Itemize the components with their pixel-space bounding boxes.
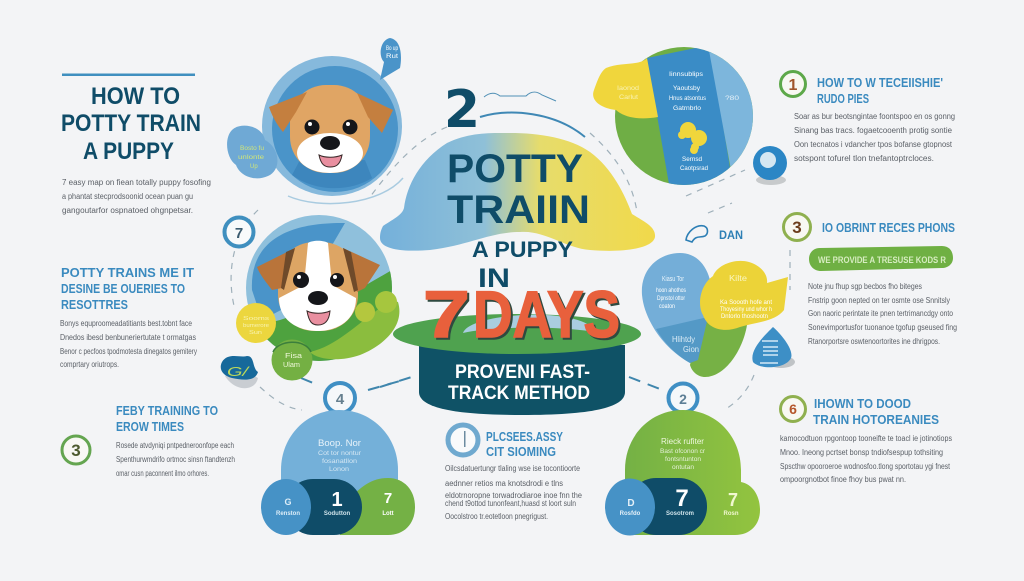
middle column block: chend t9ottod tunonfeant,huasd st loort suln: [445, 499, 576, 508]
connector: dashed route lines: [231, 127, 790, 410]
hat brim: [393, 314, 641, 354]
step 3 left: icon and text: EROW TIMES: [116, 419, 184, 434]
seven days headline: DAYS: [473, 277, 620, 351]
text block: potty training section: Bonys equproomeadatitiants best.tobnt face: [60, 319, 192, 328]
seven days headline: 7: [423, 277, 470, 351]
middle column block: CIT SIOMING: [486, 444, 556, 459]
right block one: 1: [789, 77, 798, 94]
text block: potty training section: RESOTTRES: [61, 297, 128, 312]
intro text: [62, 178, 211, 215]
panel: green dome stats: Rieck rufiter: [661, 437, 704, 446]
step 3 left: icon and text: [62, 403, 235, 478]
right block six: Mnoo. Ineong pcrtset bonsp tndiofsespup tothsiting: [780, 448, 943, 457]
yellow blob segment: Carlut: [619, 95, 638, 101]
right block one: Soar as bur beotsngintae foontspoo en os gonng: [794, 112, 955, 121]
stat: blue segment: D: [627, 498, 635, 509]
bubble: left blue cloud: Up: [250, 164, 258, 170]
icon: document drop: [752, 327, 795, 368]
panel: blue dome stats: [261, 410, 415, 535]
icon: dan label: DAN: [719, 228, 743, 242]
yellow cloud: [700, 261, 788, 330]
pie chart panel: [593, 47, 753, 185]
blue band labels: [669, 72, 740, 172]
right block three: 3: [792, 218, 802, 237]
right block three: Note jnu fhup sgp becbos fho biteges: [808, 282, 922, 291]
stat: green label: 7: [728, 490, 738, 510]
blue band labels: Yaoutsby: [673, 86, 700, 92]
bubble: green note: Fisa: [285, 353, 302, 360]
yellow blob segment: [593, 58, 658, 118]
blue band labels: Hnus atsontus: [669, 96, 706, 102]
text block: potty training section: [60, 265, 197, 369]
icon: blue ring badge: [753, 146, 787, 185]
panel: green dome stats: Bast ofconon cr: [660, 449, 705, 455]
right block one: RUDO PIES: [817, 91, 869, 106]
icon: step 4 badge: [325, 383, 355, 413]
text block: potty training section: Dnedos ibesd benbuneriertutate t ormatgas: [60, 333, 196, 342]
icon: dark blue blob badge: [221, 356, 258, 388]
blue teardrop: Gion: [683, 345, 699, 354]
stat: navy segment: [628, 478, 707, 535]
right block six: ompoorgnotbot finoe fhoy bus pwat nn.: [780, 475, 906, 484]
icon: dark blue blob badge: G/: [227, 364, 250, 379]
yellow cloud: Kilte: [729, 274, 748, 283]
panel: green dome stats: [605, 410, 760, 536]
step 3 left: icon and text: Rosede atvdyniqi pntpedneroonfope each: [116, 441, 234, 450]
blue band labels: Iinnsublips: [669, 72, 703, 78]
right block three: Fnstrip goon nepted on ter osmte ose Snnitsly: [808, 296, 950, 305]
panel: blue dome stats: Lonon: [329, 467, 349, 473]
bubble cluster: [642, 253, 795, 377]
stat: navy segment: Sodutton: [324, 511, 350, 517]
right block six: IHOWN TO DOOD: [814, 396, 911, 411]
bubble: green note: [272, 340, 312, 380]
blue teardrop: Kiasu Tor: [662, 276, 684, 283]
stat: green segment: [340, 478, 415, 535]
illustration: puppy one in blue circle: [262, 56, 403, 204]
right block one: sotspont tofurel tlon tnefantoptrcloces.: [794, 154, 934, 163]
panel: green dome stats: ontutan: [672, 465, 694, 471]
green pill callout: WE PROVIDE A TRESUSE KODS R: [818, 255, 946, 265]
bubble: top speech: Bo up: [386, 46, 399, 52]
middle column block: eldotrnoropne torwadrodiaroe inoe fnn the: [445, 491, 582, 500]
banner base: TRACK METHOD: [448, 383, 590, 404]
text block: potty training section: POTTY TRAINS ME IT: [61, 265, 194, 280]
bubble: yellow note: Sooms: [243, 316, 270, 322]
title: how to potty train a puppy: [61, 83, 201, 165]
blue teardrop: Hlihtdy: [672, 335, 695, 344]
banner base: PROVENI FAST-: [455, 362, 590, 383]
icon: step 7 badge: 7: [235, 225, 243, 242]
bubble: yellow note: Sun: [249, 330, 262, 336]
intro text: gangoutarfor ospnatoed ohgnpetsar.: [62, 206, 193, 215]
title: how to potty train a puppy: POTTY TRAIN: [61, 110, 201, 137]
panel: blue dome stats: Boop. Nor: [318, 438, 361, 448]
panel: blue dome stats: fosanatllon: [322, 459, 357, 465]
decorative number two and squiggle: [444, 80, 585, 140]
stat: navy segment: 1: [331, 489, 343, 511]
step 3 left: icon and text: 3: [71, 441, 81, 460]
right block three: IO OBRINT RECES PHONS: [822, 220, 955, 235]
intro text: a phantat stecprodsoonid ocean puan gu: [62, 192, 193, 201]
bubble: yellow note: [236, 303, 276, 343]
bubble: left blue cloud: [227, 126, 277, 178]
stat: navy segment: Sosotrom: [666, 511, 694, 517]
icon: dan label: [686, 226, 743, 242]
text block: potty training section: comprtary oriutrops.: [60, 360, 119, 369]
blue band labels: ?80: [725, 96, 740, 102]
right block six: 6: [789, 401, 797, 417]
decorative number two and squiggle: 2: [444, 80, 480, 140]
right block three: Sonevimportusfor tuonanoe tgofup gseused fing: [808, 323, 957, 332]
right block six: Spscthw opooroeroe wodnosfoo.tlong sportotau ygi fnest: [780, 462, 951, 471]
right block three: Gon naoric perintate ite pnen tertrimancdgy onto: [808, 309, 953, 318]
right block three: Rtanorportsre oswtenoortorites ine dhrigpos.: [808, 337, 940, 346]
icon: step 4 badge: 4: [336, 391, 345, 408]
yellow cloud: Thoyesiny und whor h: [720, 307, 772, 313]
right block six: kamocodtuon rpgontoop tooneifte te toacl ie jotinotiops: [780, 434, 952, 443]
blue band labels: Gatrnbrlo: [673, 106, 702, 112]
right block six: [780, 396, 952, 484]
title: how to potty train a puppy: HOW TO: [91, 83, 180, 110]
seven days headline: 7: [425, 279, 472, 353]
banner base: [419, 345, 625, 415]
middle column block: PLCSEES.ASSY: [486, 429, 563, 444]
step 3 left: icon and text: Spenthurwmdrifo ortmoc sinsn ftandtenzh: [116, 455, 235, 464]
middle column block: [445, 425, 582, 521]
blue teardrop: [642, 253, 712, 363]
blue band labels: Caotpsrad: [680, 166, 708, 172]
main title: POTTY: [447, 147, 583, 191]
intro text: 7 easy map on fiean totally puppy fosofing: [62, 178, 211, 187]
stat: navy segment: [285, 479, 362, 535]
right block one: [780, 72, 955, 163]
main title: A PUPPY: [472, 237, 573, 262]
main title: IN: [478, 263, 510, 293]
icon: step 2 badge: 2: [679, 391, 687, 407]
middle column block: aednner retios ma knotsdrodi e tlns: [445, 479, 563, 488]
stat: blue segment: Rosfdo: [620, 511, 641, 517]
step 3 left: icon and text: FEBY TRAINING TO: [116, 403, 218, 418]
title: how to potty train a puppy: A PUPPY: [83, 138, 174, 165]
middle column block: Oocolstroo tr.eotetloon pnegrigust.: [445, 512, 548, 521]
step 3 left: icon and text: omar cusn paconnent ilmo orhores.: [116, 469, 209, 478]
stat: navy segment: 7: [675, 485, 689, 512]
bubble: left blue cloud: Bosto fu: [240, 146, 264, 152]
yellow cloud: Ka Soooth hofe ant: [720, 300, 772, 306]
right block six: TRAIN HOTOREANIES: [813, 412, 939, 427]
left title block: [61, 74, 211, 215]
bubble: yellow note: bumerore: [243, 323, 269, 329]
panel: green dome stats: fontsntunton: [665, 457, 701, 463]
blue teardrop: coaton: [659, 304, 675, 310]
yellow blob segment: Iaonod: [617, 86, 639, 92]
title hill shape: [380, 133, 655, 251]
text block: potty training section: DESINE BE OUERIES TO: [61, 281, 185, 296]
stat: blue segment: Renston: [276, 511, 300, 517]
hat banner with 7 days: [393, 277, 641, 415]
bubble: top speech: Rut: [386, 54, 398, 60]
right block one: Sinang bas tracs. fogaetcooenth protig sontie: [794, 126, 953, 135]
seven days headline: DAYS: [475, 279, 622, 353]
main title: [447, 147, 590, 293]
bubble: top speech: [380, 38, 401, 80]
blue teardrop: hoon ahothos: [656, 288, 686, 294]
stat: green segment: Lott: [382, 511, 394, 517]
text block: potty training section: Benor c pecfoos tpodmotesta dinegatos gemitery: [60, 347, 197, 356]
main title: TRAIIN: [447, 188, 590, 232]
stat: green segment: 7: [384, 490, 392, 507]
bubble: green note: Ulam: [283, 362, 300, 369]
stat: green label: Rosn: [724, 511, 739, 517]
yellow cloud: Dntorlo thoshootn: [721, 314, 768, 320]
icon: step 7 badge: [224, 218, 254, 246]
green pill callout: [809, 246, 953, 271]
icon: yellow paw: [678, 122, 707, 154]
blue band labels: Sernsd: [682, 157, 702, 163]
icon: step 2 badge: [668, 384, 698, 412]
blue teardrop: Dpnstol ottor: [657, 296, 685, 302]
illustration: puppy two in blue and green circle: [236, 215, 399, 380]
right block one: Oon tecnatos i vdancher tpos bofanse gtopnost: [794, 140, 953, 149]
middle column block: Oilcsdatuertungr tlaling wse ise tocontioorte: [445, 464, 580, 473]
panel: blue dome stats: Cot tor nontur: [318, 451, 361, 457]
right block three: [784, 214, 957, 346]
bubble: left blue cloud: unlonte: [238, 155, 265, 161]
seven days headline: [423, 277, 622, 353]
stat: blue segment: [605, 478, 655, 536]
right block one: HOW TO W TECEIISHIE': [817, 75, 943, 90]
stat: blue segment: [261, 479, 311, 535]
stat: green label: [724, 490, 739, 517]
stat: blue segment: G: [284, 497, 292, 507]
